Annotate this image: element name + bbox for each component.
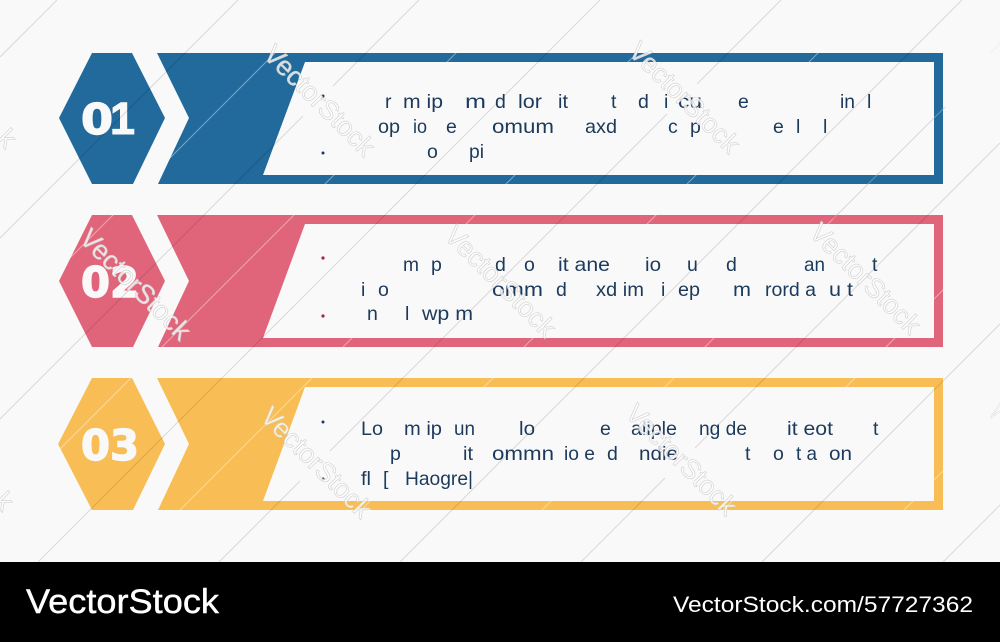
text block: pink panel text: xd im (596, 279, 644, 301)
text block: pink panel text: io (645, 254, 661, 276)
icon: yellow hexagon with number 03 (58, 378, 165, 510)
text block: pink panel text: d (556, 279, 567, 301)
text block: blue panel text: l (867, 91, 871, 113)
text block: blue panel text: io (413, 116, 427, 138)
text block: yellow panel text: ommn (492, 443, 554, 465)
icon: pink hexagon with number 02 (59, 215, 165, 347)
row 2: pink banner (59, 215, 943, 347)
text block: pink panel text: i (661, 279, 665, 301)
text block: blue panel text: o (427, 141, 438, 163)
text block: pink panel text: omm (492, 279, 543, 301)
text block: blue panel text: m (465, 91, 486, 113)
text block: yellow panel text: t a (796, 443, 817, 465)
footer bar (0, 562, 1000, 642)
panel: pink arrow frame (157, 215, 943, 347)
text block: blue panel text: r (385, 91, 392, 113)
text block: blue panel text: e (773, 116, 784, 138)
text block: yellow panel text: on (829, 443, 852, 465)
text block: yellow panel text (322, 418, 879, 490)
watermark text: VectorStock (439, 220, 562, 343)
text block: blue panel text: t (611, 91, 617, 113)
text block: yellow panel text: [ (383, 468, 389, 490)
text block: yellow panel text: m ip (404, 418, 442, 440)
text block: pink panel text: u (687, 254, 698, 276)
footer image id: VectorStock.com/57727362 (673, 592, 973, 617)
text block: blue panel text: d (638, 91, 649, 113)
icon: yellow hexagon with number 03: 03 (81, 421, 139, 470)
text block: blue panel text: in (840, 91, 855, 113)
text block: yellow panel text: Lo (361, 418, 383, 440)
text block: pink panel text: u t (829, 279, 854, 301)
text block: blue panel text: e (738, 91, 749, 113)
icon: blue hexagon with number 01: 0 (81, 95, 113, 144)
text block: pink panel text: d (726, 254, 737, 276)
text block: yellow panel text: io e (564, 443, 595, 465)
text block: yellow panel text: p (390, 443, 401, 465)
icon: blue hexagon with number 01 (59, 53, 165, 184)
text block: pink panel text: m (733, 279, 751, 301)
watermark text: VectorStock (620, 398, 743, 521)
text block: pink panel text: d (495, 254, 506, 276)
row 1: blue banner (59, 53, 943, 184)
text block: yellow panel text: lo (519, 418, 535, 440)
text block: pink panel text: an (804, 254, 825, 276)
text block: blue panel text: axd (585, 116, 617, 138)
text block: pink panel text: n (367, 303, 378, 325)
text block: pink panel text: rord a (765, 279, 816, 301)
text block: blue panel text: p (690, 116, 701, 138)
text block: yellow panel text: Haogre| (405, 468, 473, 490)
text block: yellow panel text: t (745, 443, 751, 465)
text block: blue panel text: e (446, 116, 457, 138)
text block: pink panel text: m (403, 254, 419, 276)
icon: blue hexagon with number 01: 1 (110, 93, 135, 144)
text block: yellow panel text: ndie (639, 443, 678, 465)
text block: pink panel text: o (378, 279, 389, 301)
text block: yellow panel text: ng de (699, 418, 747, 440)
text block: blue panel text: d (495, 91, 506, 113)
text block: blue panel text: c (668, 116, 678, 138)
watermark text: VectorStock (623, 36, 746, 159)
text block: blue panel text: l (823, 116, 827, 138)
footer logo text: VectorStock (26, 583, 220, 621)
text block: pink panel text: p (431, 254, 442, 276)
text block: blue panel text: op (378, 116, 400, 138)
text block: pink panel text: wp m (421, 303, 473, 325)
watermark text (0, 36, 1000, 524)
text block: blue panel text (322, 91, 871, 163)
text block: yellow panel text: un (454, 418, 475, 440)
row 3: yellow banner (58, 378, 943, 510)
watermark text: VectorStock (258, 39, 381, 162)
text block: yellow panel text: fl (361, 468, 371, 490)
text block: yellow panel text: aliple (631, 418, 677, 440)
text block: pink panel text: ep (678, 279, 700, 301)
panel: blue arrow frame (157, 53, 943, 184)
text block: pink panel text: o (524, 254, 535, 276)
watermark text: VectorStock (74, 223, 197, 346)
text block: pink panel text: i (361, 279, 365, 301)
text block: blue panel text: l (796, 116, 800, 138)
text block: blue panel text: lor (518, 91, 543, 113)
panel: yellow arrow frame (157, 378, 943, 510)
text block: yellow panel text: it (463, 443, 474, 465)
watermark text: VectorStock (255, 401, 378, 524)
watermark text: VectorStock (804, 217, 927, 340)
text block: blue panel text: cu (678, 91, 702, 113)
text block: pink panel text: l (405, 303, 409, 325)
text block: yellow panel text: e (600, 418, 611, 440)
text block: pink panel text (321, 254, 878, 325)
text block: yellow panel text: it eot (787, 418, 834, 440)
text block: blue panel text: m ip (403, 91, 443, 113)
text block: yellow panel text: o (773, 443, 784, 465)
text block: blue panel text: it (558, 91, 569, 113)
text block: yellow panel text: t (873, 418, 879, 440)
text block: pink panel text: t (872, 254, 878, 276)
icon: pink hexagon with number 02: 02 (81, 258, 139, 307)
text block: blue panel text: omum (492, 116, 554, 138)
text block: pink panel text: it ane (558, 254, 610, 276)
text block: blue panel text: pi (469, 141, 484, 163)
text block: blue panel text: i (664, 91, 668, 113)
text block: yellow panel text: d (607, 443, 618, 465)
